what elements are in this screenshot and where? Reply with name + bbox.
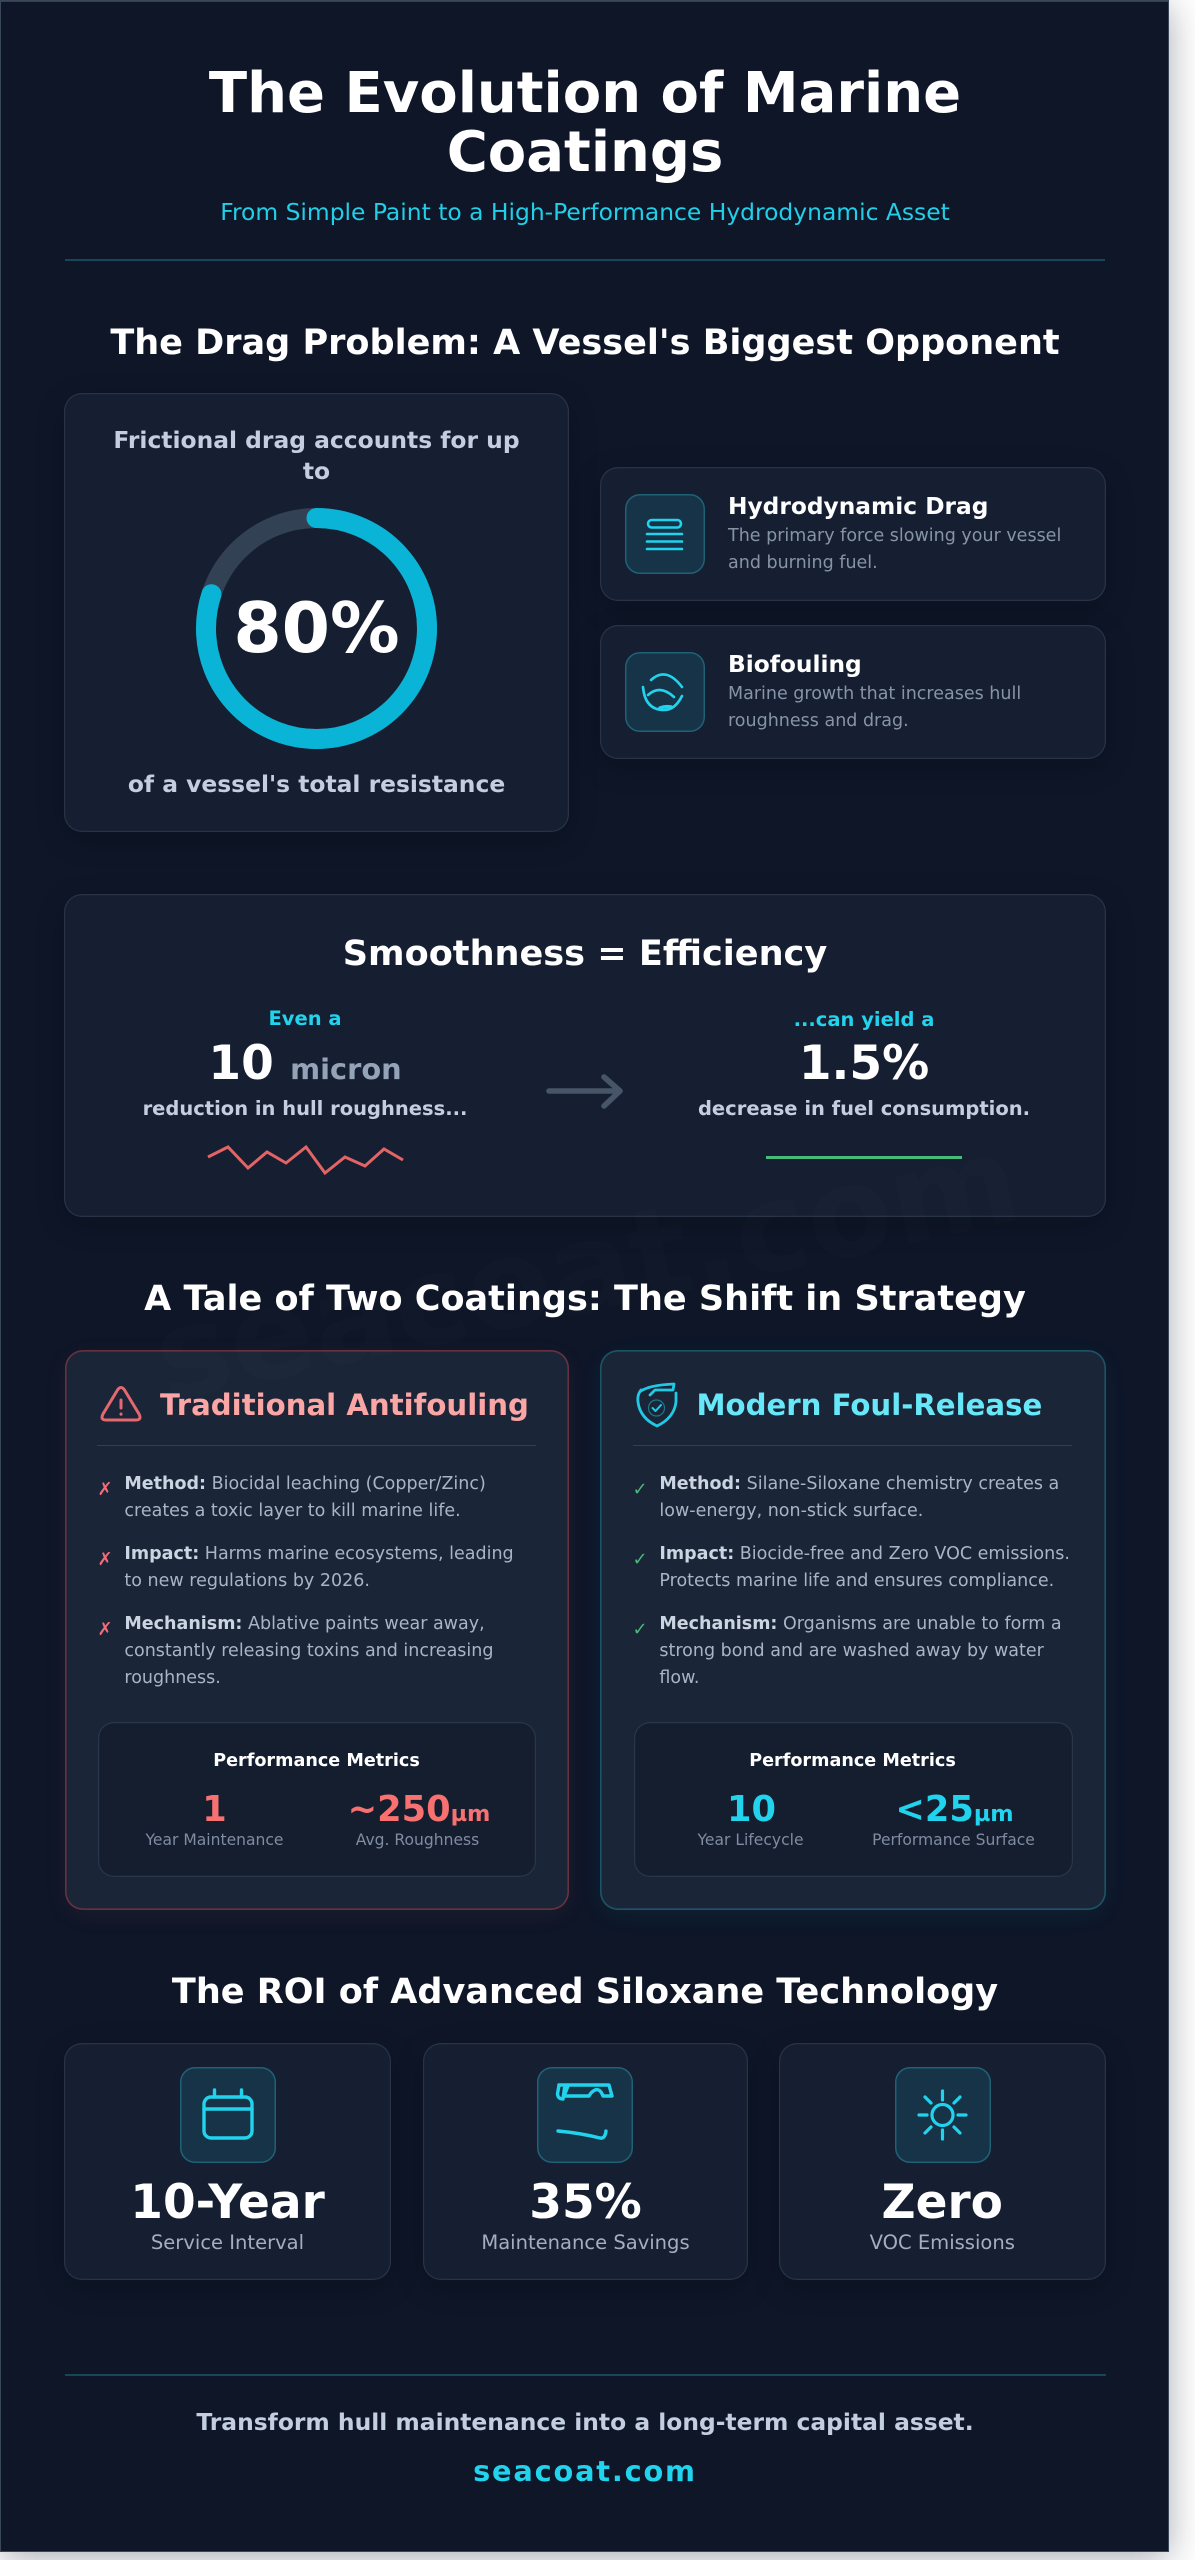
value: 35%	[529, 2174, 642, 2230]
list item: mechanism	[98, 1614, 493, 1688]
icon: sun	[895, 2067, 991, 2163]
heading: Modern Foul-Release	[696, 1388, 1042, 1422]
icon: hull savings	[537, 2067, 633, 2163]
description: The primary force slowing your vessel	[728, 526, 1061, 546]
panel: service interval	[64, 2043, 391, 2280]
stat lead-in	[113, 426, 520, 485]
panel: modern foul-release	[600, 1350, 1106, 1910]
list item: mechanism: Mechanism: Organisms are unable to form a	[659, 1614, 1062, 1634]
stat lead-in: to	[303, 457, 330, 485]
title: Coatings	[447, 120, 723, 185]
list item: mechanism: Mechanism: Ablative paints wear away,	[124, 1614, 485, 1634]
list item: impact: Protects marine life and ensures compliance.	[659, 1571, 1054, 1591]
stat lead-in: Frictional drag accounts for up	[113, 426, 520, 454]
metric label: Year Lifecycle	[697, 1831, 804, 1849]
footer tagline: Transform hull maintenance into a long-term capital asset.	[196, 2408, 974, 2436]
metrics heading: Performance Metrics	[749, 1751, 956, 1771]
heading: ROI: The ROI of Advanced Siloxane Technology	[172, 1971, 998, 2012]
heading: Traditional Antifouling	[160, 1388, 529, 1422]
value: 10-Year	[130, 2174, 325, 2230]
footer website: seacoat.com	[473, 2454, 697, 2488]
list item: method: Method: Silane-Siloxane chemistry creates a	[659, 1474, 1059, 1494]
title: The Evolution of Marine	[209, 61, 961, 126]
rough surface line	[207, 1144, 404, 1176]
label: Service Interval	[151, 2231, 304, 2254]
list item: impact: ✓	[632, 1549, 648, 1570]
title	[209, 61, 961, 185]
heading: drag problem: The Drag Problem: A Vessel's Biggest Opponent	[110, 322, 1060, 363]
panel: smoothness equals efficiency	[64, 894, 1106, 1217]
description	[728, 526, 1061, 573]
icon: warning triangle	[100, 1386, 142, 1422]
panel: performance metrics	[98, 1722, 536, 1877]
metric label: Performance Surface	[872, 1831, 1035, 1849]
list item: mechanism	[632, 1614, 1062, 1688]
list item: impact: ✗	[98, 1549, 113, 1570]
stat value: 80%	[233, 588, 400, 669]
label: VOC Emissions	[870, 2231, 1015, 2254]
value: 1.5 percent: 1.5%	[799, 1036, 929, 1091]
watermark: seacoat.com	[143, 1107, 1032, 1431]
panel: traditional antifouling	[65, 1350, 569, 1910]
heading: Smoothness = Efficiency	[343, 933, 827, 974]
panel: maintenance savings	[423, 2043, 748, 2280]
list item: method: ✓	[632, 1479, 648, 1500]
icon: biofouling	[625, 652, 705, 732]
label: Maintenance Savings	[481, 2231, 690, 2254]
list item: impact: to new regulations by 2026.	[124, 1571, 370, 1591]
list item: mechanism: roughness.	[124, 1668, 221, 1688]
panel: VOC emissions	[779, 2043, 1106, 2280]
icon: drag lines	[625, 494, 705, 574]
metric value: ~250µm	[348, 1789, 490, 1830]
list item: method: creates a toxic layer to kill marine life.	[124, 1501, 461, 1521]
heading: two coatings: A Tale of Two Coatings: The Shift in Strategy	[144, 1278, 1026, 1319]
list item: impact	[98, 1544, 514, 1591]
value: Zero	[882, 2174, 1003, 2230]
list item: method	[632, 1474, 1059, 1521]
list item: mechanism: ✓	[632, 1619, 648, 1640]
list item: method	[98, 1474, 486, 1521]
list item: mechanism: strong bond and are washed away by water	[659, 1641, 1044, 1661]
panel: performance metrics	[634, 1722, 1072, 1877]
caption right: decrease in fuel consumption.	[698, 1097, 1030, 1120]
list item: method: low-energy, non-stick surface.	[659, 1501, 923, 1521]
heading: Hydrodynamic Drag	[728, 493, 988, 520]
caption left: reduction in hull roughness...	[143, 1097, 467, 1120]
metric value: <25µm	[895, 1789, 1014, 1830]
description	[728, 684, 1021, 731]
smooth surface line	[766, 1156, 962, 1158]
icon: shield check	[636, 1382, 678, 1428]
metrics heading: Performance Metrics	[213, 1751, 420, 1771]
metric label: Avg. Roughness	[356, 1831, 479, 1849]
list item: impact: Impact: Harms marine ecosystems, leading	[124, 1544, 514, 1564]
panel: biofouling	[600, 625, 1106, 759]
list item: mechanism: flow.	[659, 1668, 699, 1688]
metric value: 1	[202, 1789, 227, 1830]
value: 10 micron: 10 micron	[208, 1036, 402, 1090]
description: and burning fuel.	[728, 553, 878, 573]
metric label: Year Maintenance	[146, 1831, 283, 1849]
lead-in left: Even a	[268, 1006, 342, 1030]
lead-in right: ...can yield a	[794, 1008, 934, 1030]
donut chart: 80 percent	[196, 508, 437, 749]
icon: calendar	[180, 2067, 276, 2163]
list item: method: ✗	[98, 1479, 113, 1500]
stat caption: of a vessel's total resistance	[128, 770, 505, 798]
list item: impact: Impact: Biocide-free and Zero VOC emissions.	[659, 1544, 1070, 1564]
description: roughness and drag.	[728, 711, 909, 731]
subtitle: From Simple Paint to a High-Performance Hydrodynamic Asset	[220, 198, 950, 226]
heading: Biofouling	[728, 651, 862, 678]
list item: method: Method: Biocidal leaching (Copper/Zinc)	[124, 1474, 486, 1494]
list item: mechanism: ✗	[98, 1619, 113, 1640]
list item: impact	[632, 1544, 1070, 1591]
description: Marine growth that increases hull	[728, 684, 1021, 704]
panel: frictional drag stat	[64, 393, 569, 832]
arrow	[546, 1074, 623, 1109]
panel: hydrodynamic drag	[600, 467, 1106, 601]
metric value: 10	[727, 1789, 776, 1830]
list item: mechanism: constantly releasing toxins and increasing	[124, 1641, 493, 1661]
